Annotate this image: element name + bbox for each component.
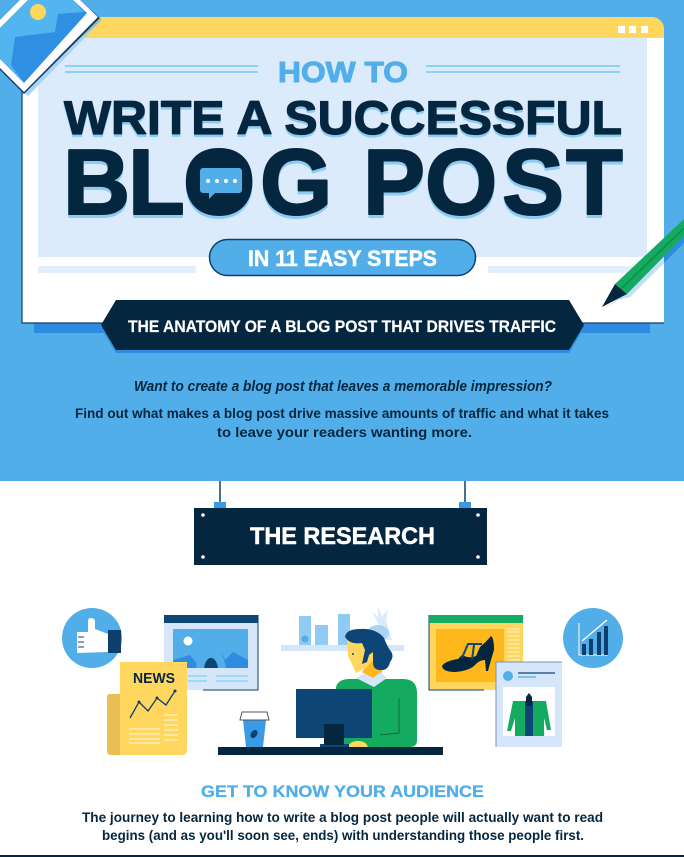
heading: blog: BLOG bbox=[63, 130, 332, 234]
icon: thumbs up circle bbox=[62, 608, 122, 668]
icon: speech bubble in the O bbox=[197, 157, 245, 205]
browser card: shoe bbox=[429, 615, 523, 690]
pill: in 11 easy steps bbox=[210, 240, 476, 276]
icon: newspaper: NEWS bbox=[133, 670, 175, 687]
icon: coffee cup bbox=[240, 712, 269, 747]
heading: get to know your audience: GET TO KNOW YOUR AUDIENCE bbox=[201, 782, 484, 801]
social card: jacket bbox=[496, 662, 562, 747]
body text: The journey to learning how to write a blog post people will actually want to read bbox=[82, 809, 603, 825]
icon: green pencil bbox=[602, 219, 684, 309]
section sign: the research: THE RESEARCH bbox=[250, 523, 435, 550]
intro paragraph bbox=[75, 405, 609, 440]
intro paragraph: to leave your readers wanting more. bbox=[217, 424, 472, 440]
heading: write a successful: WRITE A SUCCESSFUL bbox=[64, 94, 622, 148]
decorative title lines right bbox=[426, 65, 620, 73]
pill: in 11 easy steps: IN 11 EASY STEPS bbox=[248, 246, 437, 271]
heading: post: POST bbox=[363, 133, 623, 237]
heading: write a successful: WRITE A SUCCESSFUL bbox=[64, 92, 622, 145]
icon: picture frame bbox=[0, 0, 102, 96]
browser window panel bbox=[22, 17, 664, 333]
person at desk bbox=[336, 629, 417, 747]
icon: growth chart circle bbox=[563, 608, 623, 668]
hero background bbox=[0, 0, 684, 481]
intro paragraph: Find out what makes a blog post drive massive amounts of traffic and what it takes bbox=[75, 405, 609, 421]
decorative title lines left bbox=[65, 65, 258, 73]
body text bbox=[82, 809, 603, 843]
ribbon: anatomy of a blog post bbox=[101, 300, 584, 353]
computer monitor bbox=[296, 689, 372, 747]
heading: how to: HOW TO bbox=[278, 57, 408, 89]
body text: begins (and as you'll soon see, ends) with understanding those people first. bbox=[102, 827, 584, 843]
desk bbox=[218, 747, 443, 755]
browser card: landscape image bbox=[164, 615, 258, 690]
ribbon: anatomy of a blog post: THE ANATOMY OF A BLOG POST THAT DRIVES TRAFFIC bbox=[128, 318, 556, 336]
section sign: the research bbox=[194, 481, 487, 565]
intro question: Want to create a blog post that leaves a memorable impression? bbox=[134, 379, 552, 395]
bottom rule bbox=[0, 855, 684, 857]
heading: blog: BLOG bbox=[63, 133, 332, 237]
heading: post: POST bbox=[363, 130, 623, 234]
shelf with books bbox=[281, 607, 404, 651]
icon: newspaper bbox=[107, 662, 187, 755]
